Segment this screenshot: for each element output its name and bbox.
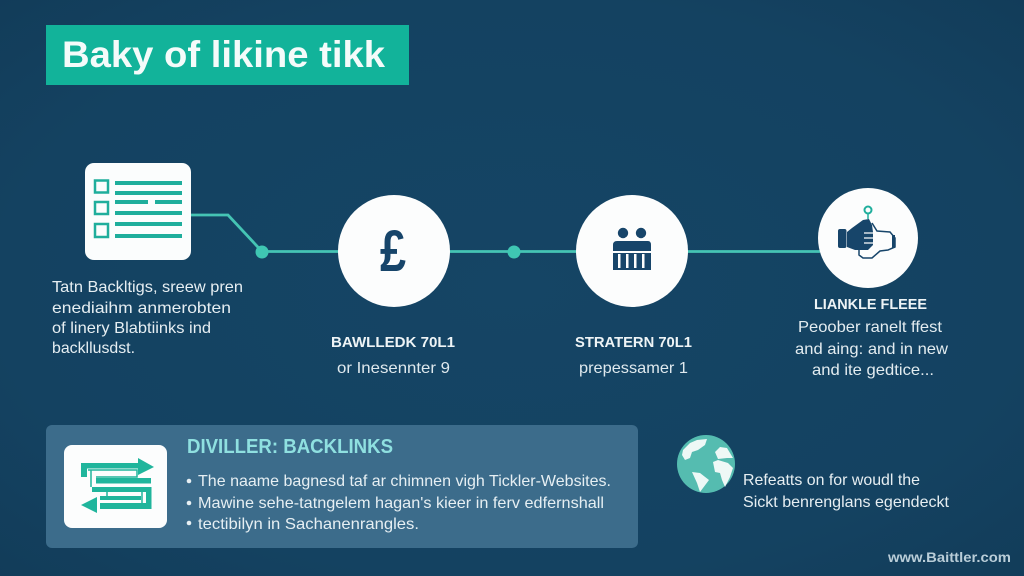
list: definition bullets: Mawine sehe-tatngelem hagan's kieer in ferv edfernshall (198, 495, 604, 512)
text: step two detail: or Inesennter 9 (337, 360, 450, 377)
text: step four description (795, 319, 948, 379)
text: global note: Sickt benrenglans egendeckt (743, 494, 950, 511)
icon: globe (677, 435, 735, 493)
panel: step three (575, 195, 692, 377)
icon: pound sign circle (338, 195, 450, 307)
text: step four description: and aing: and in new (795, 341, 948, 358)
text: intro description: backllusdst. (52, 340, 135, 357)
list: definition bullets: tectibilyn in Sachanenrangles. (198, 516, 419, 533)
icon: hand with cable circle (818, 188, 918, 288)
icon: checklist document (85, 163, 191, 260)
text: intro description: Tatn Backltigs, sreew pren (52, 279, 243, 296)
text: step four description: Peoober ranelt ffest (798, 319, 943, 336)
panel: global note (677, 435, 950, 511)
list: definition bullets: The naame bagnesd taf ar chimnen vigh Tickler-Websites. (198, 473, 611, 490)
list: definition bullets (187, 473, 611, 533)
panel: intro step (52, 163, 243, 357)
text: global note (743, 472, 950, 511)
panel: step four (795, 188, 948, 379)
text: global note: Refeatts on for woudl the (743, 472, 920, 489)
panel: step two (331, 195, 455, 377)
text: intro description (52, 279, 243, 357)
icon: interlinked arrows (64, 445, 167, 528)
heading: step four: LIANKLE FLEEE (814, 296, 927, 313)
icon: people at table circle (576, 195, 688, 307)
timeline connector (190, 215, 820, 252)
heading: step three: STRATERN 70L1 (575, 334, 692, 351)
text: website credit: www.Baittler.com (887, 549, 1011, 565)
title banner: Baky of likine tikk (62, 34, 385, 75)
text: intro description: of linery Blabtiinks ind (52, 320, 211, 337)
text: step four description: and ite gedtice... (812, 362, 934, 379)
text: intro description: enediaihm anmerobten (52, 300, 231, 317)
panel: definition box (46, 425, 638, 548)
heading: step two: BAWLLEDK 70L1 (331, 334, 455, 351)
icon: pound sign circle: £ (380, 219, 406, 284)
text: step three detail: prepessamer 1 (579, 360, 688, 377)
title banner (46, 25, 409, 85)
node: middle connector dot (508, 246, 520, 258)
heading: definition box: DIVILLER: BACKLINKS (187, 436, 393, 458)
node: first connector dot (256, 246, 268, 258)
